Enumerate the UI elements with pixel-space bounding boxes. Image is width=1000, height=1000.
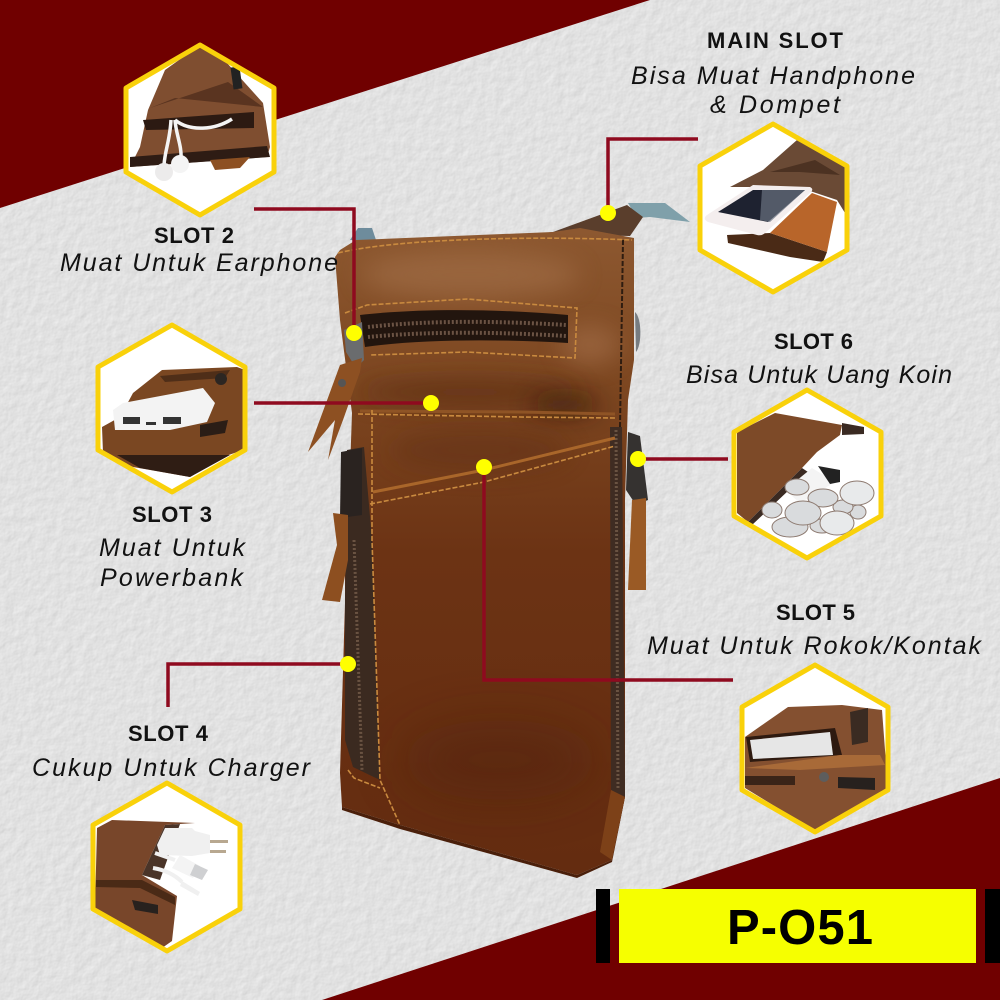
label: slot 4 — [32, 721, 312, 782]
bag body — [335, 228, 634, 875]
upper pull tab — [308, 322, 364, 460]
strap base — [535, 205, 643, 236]
leather shading — [360, 251, 620, 800]
product code badge — [596, 889, 1000, 963]
label: slot 6: Bisa Untuk Uang Koin — [686, 361, 952, 389]
label: slot 4: SLOT 4 — [128, 721, 209, 746]
label: main slot: Bisa Muat Handphone — [631, 62, 915, 90]
label: slot 2: SLOT 2 — [154, 223, 234, 248]
right pull tab — [628, 498, 646, 590]
right side metal ring — [635, 312, 640, 352]
product: leather bag — [308, 203, 690, 878]
label: slot 3: Muat Untuk — [99, 534, 246, 562]
label: slot 3: Powerbank — [100, 564, 244, 592]
hexagon: powerbank — [98, 325, 245, 492]
connector: slot 6 — [630, 451, 728, 467]
label: main slot — [631, 28, 915, 119]
label: slot 5: Muat Untuk Rokok/Kontak — [647, 632, 982, 660]
top zipper head — [350, 228, 376, 240]
hexagon: main slot — [700, 124, 847, 292]
left zipper gusset — [345, 447, 380, 780]
label: main slot: MAIN SLOT — [707, 28, 844, 53]
right zipper gusset — [610, 427, 625, 797]
connector: slot 4 — [168, 656, 356, 707]
right seam — [620, 240, 623, 427]
main zipper — [360, 310, 568, 347]
label: slot 6 — [686, 329, 952, 389]
label: slot 3 — [99, 502, 246, 592]
bottom corner fold — [600, 790, 625, 860]
right clasp — [626, 432, 648, 505]
label: slot 2 — [60, 223, 338, 277]
hexagon: coins — [734, 390, 881, 558]
hexagon: charger — [93, 783, 240, 951]
bottom rim — [342, 797, 625, 878]
product code badge: P-O51 — [727, 901, 873, 955]
label: slot 4: Cukup Untuk Charger — [32, 754, 312, 782]
connector: slot 3 — [254, 395, 439, 411]
label: slot 6: SLOT 6 — [774, 329, 853, 354]
connector: slot 2 — [254, 209, 362, 341]
pocket edge — [373, 438, 615, 492]
mid zipper clasp — [340, 448, 362, 518]
left pull tab — [322, 513, 348, 602]
label: slot 5: SLOT 5 — [776, 600, 855, 625]
hexagon: cigarette pocket — [742, 665, 888, 832]
connector: main slot — [600, 139, 698, 221]
label: slot 5 — [647, 600, 982, 660]
stitching — [338, 238, 632, 825]
red corner top-left — [0, 0, 650, 208]
strap metal buckle — [628, 203, 690, 222]
label: slot 3: SLOT 3 — [132, 502, 212, 527]
red corner bottom-right — [322, 778, 1000, 1000]
label: main slot: & Dompet — [710, 91, 841, 119]
connector: slot 5 — [476, 459, 733, 680]
label: slot 2: Muat Untuk Earphone — [60, 249, 338, 277]
hexagon: earphone pocket — [126, 45, 274, 215]
